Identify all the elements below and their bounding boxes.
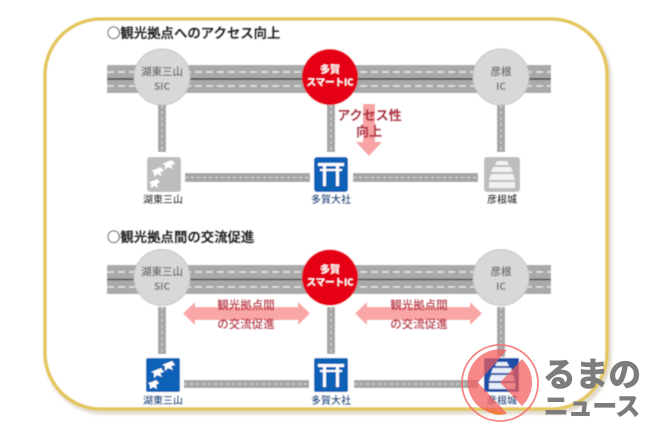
callout: left exchange text: の交流促進 (217, 316, 275, 332)
node: Koto Sanzan SIC: SIC (154, 78, 170, 93)
node: Taga Smart IC (302, 49, 358, 105)
node: Hikone IC: 彦根 (490, 64, 512, 79)
icon: Taga Taisha shrine (314, 157, 348, 192)
label: Taga Taisha: 多賀大社 (311, 392, 351, 407)
watermark: Kuruma no News logo (462, 345, 641, 423)
label: Hikone Castle: 彦根城 (487, 392, 517, 407)
callout: access improvement: アクセス性 (337, 105, 402, 124)
icon: Hikone Castle blue (484, 358, 519, 392)
road: vertical links (158, 105, 505, 152)
label: Hikone Castle: 彦根城 (487, 191, 517, 206)
node: Hikone IC: 彦根 (490, 264, 512, 279)
icon: Hikone castle grey (484, 157, 520, 192)
road: vertical links (158, 307, 505, 357)
callout: right exchange text: の交流促進 (390, 316, 448, 332)
node: Taga Smart IC: 多賀 (320, 261, 340, 276)
icon: Koto Sanzan blue (146, 358, 180, 392)
callout: right exchange text: 観光拠点間 (390, 297, 448, 313)
icon: Taga Taisha shrine (314, 358, 348, 392)
road: horizontal links (184, 380, 478, 388)
panel: access improvement diagram (107, 49, 551, 206)
node: Koto Sanzan SIC: 湖東三山 (141, 64, 183, 79)
node: Taga Smart IC: スマートIC (306, 274, 354, 288)
node: Hikone IC (473, 49, 529, 105)
arrow: access improvement (356, 104, 382, 156)
highway: bottom (107, 265, 551, 294)
label: Koto Sanzan: 湖東三山 (143, 191, 183, 206)
node: Taga Smart IC: スマートIC (306, 74, 354, 88)
icon: Koto Sanzan grey (147, 157, 181, 192)
watermark text: News: ニュース (544, 387, 640, 423)
highway: top (107, 65, 551, 93)
node: Taga Smart IC: 多賀 (320, 61, 340, 76)
heading: exchange promotion: ○観光拠点間の交流促進 (107, 226, 255, 246)
road: horizontal links (185, 173, 478, 182)
callout: left exchange text (217, 297, 275, 332)
watermark text: Kuruma no: るまの (543, 348, 641, 396)
node: Hikone IC: IC (496, 78, 506, 93)
icon: logo circle and chevron (462, 345, 538, 421)
callout: access improvement: 向上 (356, 121, 382, 140)
node: Koto Sanzan SIC (134, 49, 190, 105)
node: Koto Sanzan SIC (134, 250, 190, 306)
node: Taga Smart IC (302, 250, 358, 306)
panel: exchange promotion diagram (107, 250, 551, 407)
heading: access improvement: ○観光拠点へのアクセス向上 (107, 22, 280, 42)
node: Hikone IC: IC (496, 278, 506, 293)
node: Koto Sanzan SIC: SIC (154, 278, 170, 293)
arrow: left exchange (183, 302, 310, 325)
arrow: right exchange (355, 302, 482, 325)
node: Koto Sanzan SIC: 湖東三山 (141, 264, 183, 279)
callout: access improvement (337, 105, 402, 140)
label: Taga Taisha: 多賀大社 (311, 191, 351, 206)
node: Hikone IC (473, 250, 529, 306)
callout: right exchange text (390, 297, 448, 332)
label: Koto Sanzan: 湖東三山 (143, 392, 183, 407)
callout: left exchange text: 観光拠点間 (217, 297, 275, 313)
frame: rounded gold border (45, 19, 609, 412)
